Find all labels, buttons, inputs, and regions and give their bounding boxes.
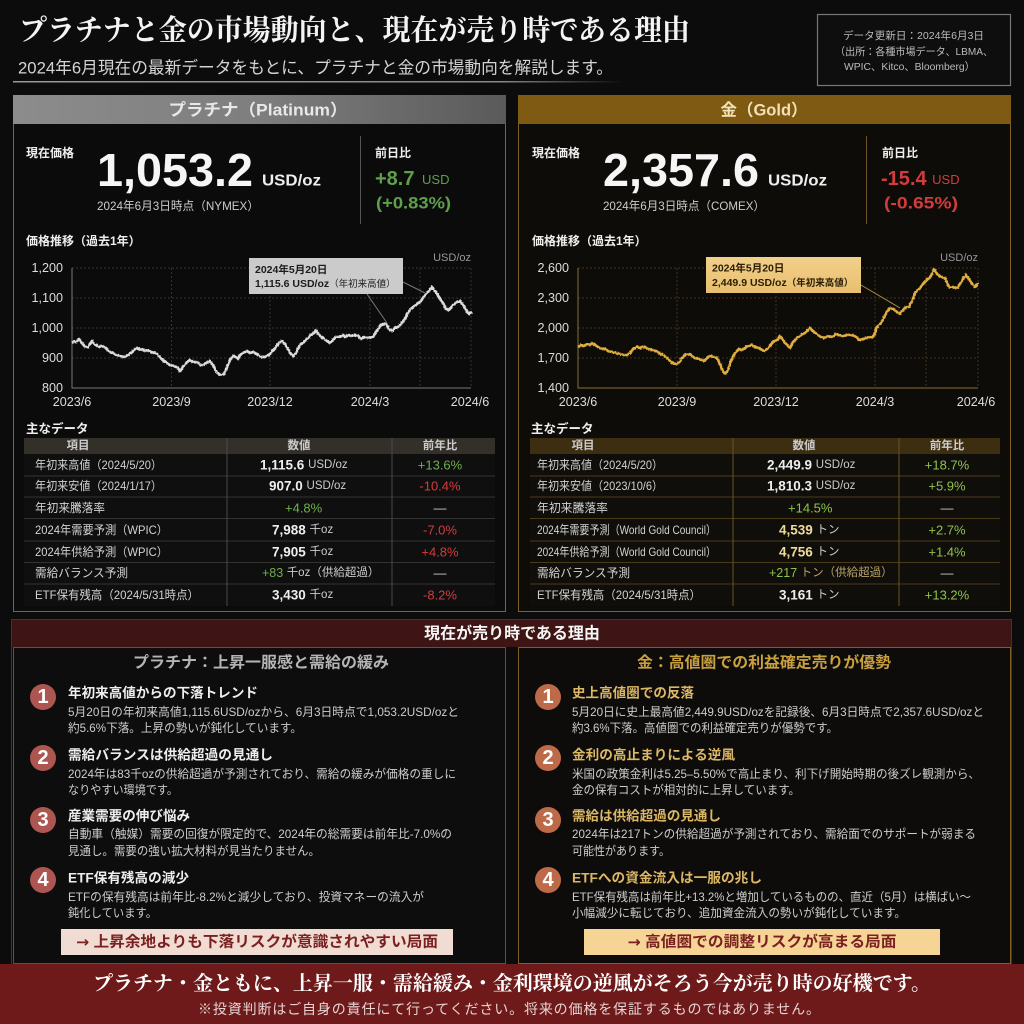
reason 1: 1 (542, 686, 554, 708)
gold current price (532, 144, 827, 213)
gold price chart: 1,400 (537, 381, 569, 395)
gold data table: +14.5% (788, 500, 833, 516)
panel: platinum reasons: プラチナ：上昇一服感と需給の緩み (133, 652, 389, 672)
gold price chart: 2023/9 (658, 395, 696, 409)
gold conclusion: → 高値圏での調整リスクが高まる局面 (628, 932, 896, 951)
reason 3: 見通し。需要の強い拡大材料が見当たりません。 (68, 844, 320, 858)
platinum data table: 年初来安値（2024/1/17） (35, 478, 162, 493)
gold data table: 4,756 トン (779, 544, 840, 560)
platinum daily change (375, 145, 451, 212)
platinum daily change: 前日比 (375, 145, 411, 160)
platinum data table: 年初来騰落率 (35, 500, 105, 515)
panel: platinum (13, 95, 506, 612)
reason 4: 小幅減少に転じており、追加資金流入の勢いが鈍化しています。 (572, 906, 906, 920)
platinum chart callout: 2024年5月20日 (255, 263, 327, 276)
gold data table: 年初来高値（2024/5/20） (537, 457, 663, 472)
reason 1: 史上高値圏での反落 (572, 684, 695, 700)
platinum data table: +4.8% (421, 544, 459, 560)
footer banner (0, 964, 1024, 1024)
reason 3: 需給は供給超過の見通し (572, 808, 721, 824)
gold data table: 2,449.9 USD/oz (767, 458, 856, 472)
gold daily change (881, 145, 960, 212)
platinum chart callout: 1,115.6 USD/oz（年初来高値） (255, 278, 396, 290)
reason 2: 金の保有コストが相対的に上昇しています。 (572, 783, 800, 797)
gold price chart: 2,000 (537, 321, 569, 335)
subtitle: 2024年6月現在の最新データをもとに、プラチナと金の市場動向を解説します。 (18, 58, 613, 78)
gold data table: 2024年需要予測（World Gold Council） (537, 523, 716, 537)
reason 1 (535, 684, 984, 735)
panel: gold reasons: 金：高値圏での利益確定売りが優勢 (637, 652, 891, 672)
gold chart callout (706, 257, 861, 293)
gold data table: 数値 (792, 438, 816, 452)
platinum data table: 2024年供給予測（WPIC） (35, 545, 168, 559)
reason 4 (30, 867, 424, 920)
gold daily change: -15.4 USD (881, 168, 960, 190)
platinum data table: -8.2% (423, 588, 457, 602)
platinum current price: 現在価格 (26, 145, 74, 160)
panel: platinum reasons (14, 648, 506, 964)
gold price chart: 2024/6 (957, 395, 995, 409)
gold data table: 年初来安値（2023/10/6） (537, 478, 663, 493)
platinum price chart: 1,200 (31, 261, 63, 275)
platinum data table: 需給バランス予測 (35, 566, 128, 580)
gold price chart: 1,700 (537, 351, 569, 365)
reason 4: 4 (542, 869, 554, 891)
reason 2: 2024年は83千ozの供給超過が予測されており、需給の緩みが価格の重しに (68, 767, 456, 781)
gold current price: 現在価格 (532, 145, 580, 160)
platinum price chart: 800 (42, 381, 63, 395)
panel: gold (518, 95, 1011, 612)
gold data table: 主なデータ (531, 421, 594, 436)
reason 2: 2 (37, 747, 49, 769)
platinum price chart: 2024/3 (351, 395, 389, 409)
platinum price chart: 1,100 (31, 291, 63, 305)
gold price chart: 2023/12 (753, 395, 799, 409)
platinum daily change: (+0.83%) (376, 194, 451, 212)
reason 3: 自動車（触媒）需要の回復が限定的で、2024年の総需要は前年比-7.0%の (68, 827, 452, 841)
platinum data table: ETF保有残高（2024/5/31時点） (35, 588, 199, 602)
gold data table: 需給バランス予測 (537, 566, 630, 580)
reason 4: ETF保有残高は前年比+13.2%と増加しているものの、直近（5月）は横ばい〜 (572, 890, 971, 904)
platinum data table: -7.0% (423, 522, 457, 538)
platinum data table: 項目 (66, 439, 90, 452)
reason 1: 1 (37, 686, 49, 708)
platinum data table: 数値 (288, 438, 311, 452)
gold price chart: 2,300 (537, 291, 569, 305)
platinum data table: +13.6% (418, 458, 463, 472)
platinum current price (26, 144, 321, 213)
gold conclusion (584, 929, 940, 955)
platinum data table: — (434, 566, 446, 580)
reason 1: 年初来高値からの下落トレンド (68, 684, 258, 700)
gold data table: 2024年供給予測（World Gold Council） (537, 545, 716, 559)
gold price chart: USD/oz (940, 252, 978, 264)
platinum price chart: 価格推移（過去1年） (26, 233, 141, 248)
reason 3 (30, 807, 452, 858)
platinum current price: 1,053.2 (97, 144, 253, 196)
platinum header (13, 95, 506, 124)
platinum header: プラチナ（Platinum） (168, 100, 348, 120)
platinum data table: 907.0 USD/oz (269, 478, 346, 494)
platinum price chart: 2023/9 (152, 395, 191, 409)
reason 2 (30, 745, 456, 797)
platinum data table: 1,115.6 USD/oz (260, 458, 348, 472)
platinum data table: — (434, 500, 446, 516)
platinum daily change: +8.7 USD (375, 168, 450, 190)
platinum price chart: 2024/6 (451, 395, 489, 409)
platinum price chart: 2023/6 (53, 395, 91, 409)
reason 3: 産業需要の伸び悩み (68, 808, 190, 824)
gold data table: ETF保有残高（2024/5/31時点） (537, 588, 701, 602)
platinum price chart: USD/oz (433, 252, 471, 264)
reason 1: 約5.6%下落。上昇の勢いが鈍化しています。 (68, 721, 302, 735)
gold chart callout: 2024年5月20日 (712, 262, 784, 274)
reason 1: 5月20日に史上最高値2,449.9USD/ozを記録後、6月3日時点で2,357.6USD/ozと (572, 705, 984, 719)
gold data table: — (940, 566, 954, 580)
platinum conclusion: → 上昇余地よりも下落リスクが意識されやすい局面 (76, 932, 438, 951)
gold data table: 前年比 (930, 438, 965, 452)
platinum data table: 2024年需要予測（WPIC） (35, 523, 168, 537)
platinum data table: 主なデータ (26, 421, 89, 436)
gold data table: 項目 (572, 439, 594, 452)
reason 3: 2024年は217トンの供給超過が予測されており、需給面でのサポートが弱まる (572, 827, 976, 841)
gold data table: +2.7% (928, 522, 966, 538)
gold price chart: 2,600 (537, 261, 569, 275)
platinum data table: 年初来高値（2024/5/20） (35, 457, 162, 472)
reason 2: なりやすい環境です。 (68, 783, 178, 797)
gold price chart: 2024/3 (856, 395, 894, 409)
gold chart callout: 2,449.9 USD/oz（年初来高値） (712, 276, 853, 289)
gold header (518, 95, 1011, 124)
gold price chart (532, 233, 995, 409)
panel: reasons (12, 620, 1012, 964)
reason 2: 米国の政策金利は5.25–5.50%で高止まり、利下げ開始時期の後ズレ観測から、 (572, 767, 980, 781)
platinum price chart: 1,000 (31, 321, 63, 335)
platinum data table: +83 千oz（供給超過） (262, 565, 379, 580)
platinum data table (24, 421, 495, 606)
reason 1: 5月20日の年初来高値1,115.6USD/ozから、6月3日時点で1,053.2USD/ozと (68, 705, 459, 719)
data source box (818, 14, 1010, 86)
data source box: （出所：各種市場データ、LBMA、 (835, 45, 993, 58)
reason 3: 3 (542, 809, 554, 831)
reason 4: ETFへの資金流入は一服の兆し (572, 870, 762, 886)
reason 4: 鈍化しています。 (68, 906, 157, 920)
reason 4: ETF保有残高の減少 (68, 870, 190, 886)
platinum chart callout (249, 258, 403, 294)
gold data table: 1,810.3 USD/oz (767, 478, 856, 494)
gold data table: +1.4% (928, 544, 966, 560)
platinum data table: +4.8% (285, 500, 323, 516)
reasons header (12, 620, 1011, 647)
gold price chart: 価格推移（過去1年） (532, 233, 647, 248)
platinum data table: -10.4% (419, 478, 461, 494)
gold data table: +217 トン（供給超過） (769, 565, 893, 580)
gold data table: 3,161 トン (779, 588, 840, 602)
gold daily change: 前日比 (882, 145, 918, 160)
platinum data table: 3,430 千oz (272, 588, 333, 602)
reason 2: 金利の高止まりによる逆風 (572, 746, 735, 762)
gold current price: USD/oz (768, 172, 827, 190)
reasons header: 現在が売り時である理由 (424, 624, 600, 642)
gold daily change: (-0.65%) (884, 194, 958, 212)
panel: gold reasons (518, 648, 1010, 964)
gold data table: 4,539 トン (779, 522, 840, 538)
gold data table (530, 421, 1000, 606)
platinum price chart: 2023/12 (247, 395, 293, 409)
title: プラチナと金の市場動向と、現在が売り時である理由 (19, 14, 690, 47)
data source box: データ更新日：2024年6月3日 (843, 29, 984, 42)
gold current price: 2,357.6 (603, 144, 759, 196)
reason 1 (30, 684, 459, 735)
reason 2: 2 (542, 747, 554, 769)
platinum price chart: 900 (42, 351, 63, 365)
gold data table: +5.9% (928, 478, 966, 494)
reason 3: 3 (37, 809, 49, 831)
platinum current price: 2024年6月3日時点（NYMEX） (97, 199, 259, 213)
platinum conclusion (61, 929, 453, 955)
gold price chart: 2023/6 (559, 395, 597, 409)
platinum current price: USD/oz (262, 172, 321, 190)
gold data table: +18.7% (925, 458, 970, 472)
gold current price: 2024年6月3日時点（COMEX） (603, 199, 765, 213)
gold header: 金（Gold） (720, 100, 808, 120)
reason 4: ETFの保有残高は前年比-8.2%と減少しており、投資マネーの流入が (68, 890, 424, 904)
gold data table: +13.2% (925, 588, 970, 602)
reason 4 (535, 867, 971, 920)
reason 4: 4 (37, 869, 49, 891)
platinum data table: 前年比 (423, 438, 458, 452)
gold data table: 年初来騰落率 (537, 500, 608, 515)
platinum data table: 7,905 千oz (272, 544, 333, 560)
platinum price chart (26, 233, 489, 409)
reason 2: 需給バランスは供給超過の見通し (68, 746, 273, 762)
reason 3: 可能性があります。 (572, 844, 670, 858)
footer banner: ※投資判断はご自身の責任にて行ってください。将来の価格を保証するものではありません。 (198, 1001, 820, 1017)
reason 3 (535, 807, 976, 858)
reason 2 (535, 745, 980, 797)
gold data table: — (940, 500, 954, 516)
reason 1: 約3.6%下落。高値圏での利益確定売りが優勢です。 (572, 721, 838, 735)
platinum data table: 7,988 千oz (272, 522, 333, 538)
data source box: WPIC、Kitco、Bloomberg） (844, 61, 975, 73)
footer banner: プラチナ・金ともに、上昇一服・需給緩み・金利環境の逆風がそろう今が売り時の好機です。 (93, 971, 931, 995)
